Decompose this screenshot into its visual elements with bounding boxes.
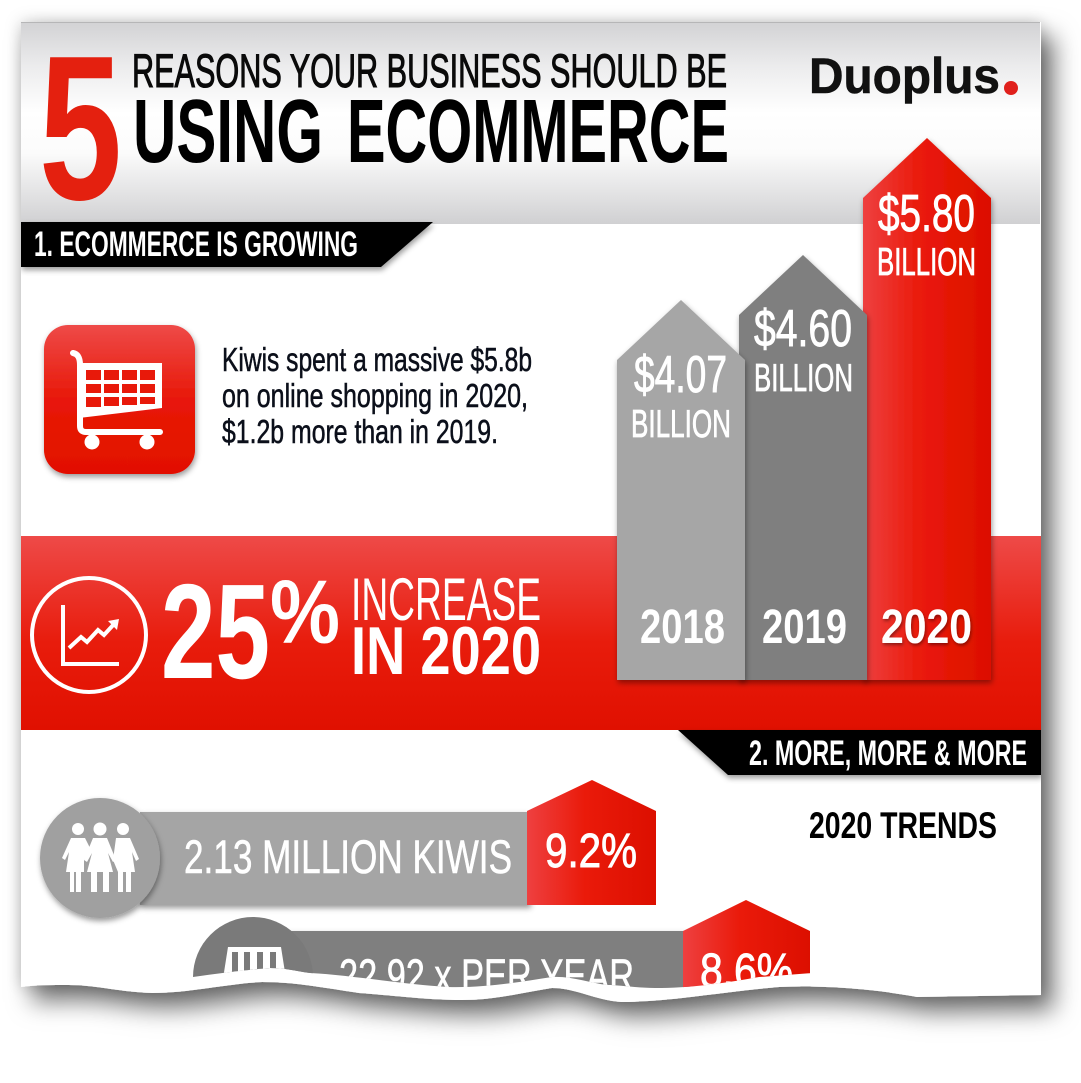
year labels (641, 609, 974, 648)
trend row 1: 2.13 MILLION KIWIS (184, 830, 512, 883)
section ribbon 1: 1. ECOMMERCE IS GROWING (34, 225, 358, 264)
section ribbon 2 (678, 730, 1041, 775)
icon: three women (62, 822, 139, 892)
statistic: 25%: 25 (161, 556, 270, 707)
arrow bar: 2018 (617, 300, 745, 680)
header top rule (21, 22, 1040, 23)
statistic label: INCREASE (351, 566, 541, 633)
arrow bar: 2018: $4.07 (634, 346, 727, 404)
section ribbon 1 (21, 222, 433, 267)
header band (21, 22, 1040, 224)
body text: Kiwis spent a massive $5.8b (222, 341, 532, 378)
trend row 1: 9.2% (545, 825, 637, 878)
trends heading: 2020 TRENDS (809, 805, 997, 846)
title numeral 5: 5 (39, 13, 122, 243)
trend row 2: 8.6% (700, 945, 793, 998)
arrow bar: 2019: BILLION (754, 357, 853, 400)
arrow bar: 2019: $4.60 (754, 300, 852, 358)
year labels: 2019 (762, 601, 847, 654)
arrow bar: 2020: BILLION (877, 241, 976, 284)
body text: on online shopping in 2020, (222, 377, 528, 414)
statistic label: IN 2020 (351, 613, 541, 689)
statistic label (354, 578, 540, 674)
body text: $1.2b more than in 2019. (222, 413, 498, 450)
icon: shopping basket (224, 947, 284, 973)
logo: Duoplus: Duoplus (809, 48, 1000, 104)
statistic: 25% (164, 580, 338, 680)
arrow bar: 2019 (739, 255, 867, 680)
year labels: 2020 (881, 601, 972, 654)
title line 2 (136, 99, 727, 163)
icon: growth chart in circle (32, 578, 146, 692)
trend row 2: 22.92 x PER YEAR (339, 949, 634, 1002)
body text (222, 341, 532, 450)
title line 1: REASONS YOUR BUSINESS SHOULD BE (132, 44, 727, 97)
statistic: 25%: % (270, 563, 340, 663)
trend row 2 (193, 900, 810, 988)
arrow bar: 2020: $5.80 (878, 185, 975, 243)
icon: shopping cart (44, 325, 195, 474)
title line 2: USING (133, 82, 323, 182)
title line 2: ECOMMERCE (347, 82, 729, 182)
trend row 1 (40, 780, 656, 918)
arrow bar: 2018: BILLION (631, 403, 731, 446)
year labels: 2018 (640, 601, 725, 654)
arrow bar: 2020 (863, 138, 991, 680)
red statistic band (21, 536, 1041, 730)
